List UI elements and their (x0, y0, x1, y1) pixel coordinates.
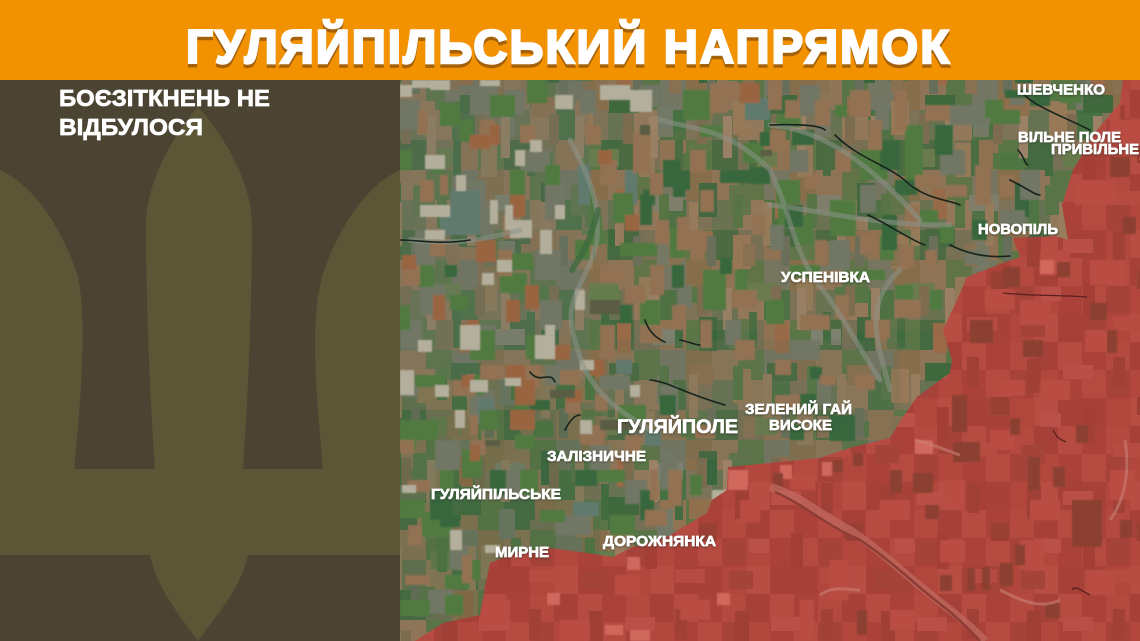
label: Успенівка: УСПЕНІВКА (781, 270, 871, 286)
label: Привільне: ПРИВІЛЬНЕ (1051, 142, 1139, 158)
map rivers and ravines (400, 90, 1090, 430)
label: Вільне Поле: ВІЛЬНЕ ПОЛЕ (1018, 130, 1121, 146)
red occupied territory overlay (400, 80, 1140, 641)
red toning: reduce contrast (400, 80, 1140, 641)
label: Зелений Гай: ЗЕЛЕНИЙ ГАЙ (745, 400, 852, 418)
label: Новопіль: НОВОПІЛЬ (978, 222, 1058, 238)
map place labels (431, 82, 1139, 561)
title: ГУЛЯЙПІЛЬСЬКИЙ НАПРЯМОК (186, 20, 949, 73)
icon: trident emblem (0, 107, 400, 641)
status text: no clashes occurred (59, 85, 270, 140)
panel: left olive background with trident (0, 80, 400, 641)
label: Шевченко: ШЕВЧЕНКО (1017, 82, 1105, 98)
title shadow: ГУЛЯЙПІЛЬСЬКИЙ НАПРЯМОК (186, 24, 949, 76)
regional tint overlays (400, 80, 1000, 620)
status text: no clashes occurred: ВІДБУЛОСЯ (59, 114, 203, 140)
label: Високе: ВИСОКЕ (769, 418, 832, 434)
status text: no clashes occurred: БОЄЗІТКНЕНЬ НЕ (59, 85, 270, 111)
red territory ridge (770, 293, 1127, 641)
map fields: farmland mosaic (400, 80, 1082, 616)
label: Залізничне: ЗАЛІЗНИЧНЕ (547, 449, 646, 465)
label: Гуляйпільське: ГУЛЯЙПІЛЬСЬКЕ (431, 485, 561, 503)
map toning: mute the farmland (400, 80, 1140, 641)
panel: satellite map (400, 80, 1140, 641)
header bar (0, 0, 1140, 80)
label: Гуляйполе: ГУЛЯЙПОЛЕ (617, 414, 738, 438)
label: Дорожнянка: ДОРОЖНЯНКА (603, 534, 717, 550)
label: Мирне: МИРНЕ (495, 545, 549, 561)
